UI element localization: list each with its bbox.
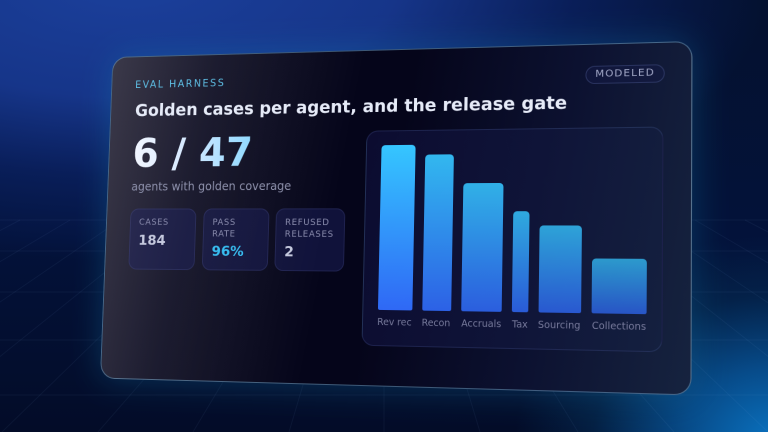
bar: Recon	[422, 154, 454, 311]
label: Tax: Tax	[512, 319, 528, 331]
eyebrow label: EVAL HARNESS	[135, 78, 226, 91]
stat label: RELEASES	[285, 230, 334, 240]
label: Accruals: Accruals	[461, 318, 501, 330]
modeled badge	[585, 64, 665, 84]
bar: Rev rec	[378, 145, 416, 310]
stat: refused releases	[274, 208, 345, 272]
stat label: REFUSED	[285, 218, 330, 228]
bar: Sourcing	[539, 225, 582, 313]
bar: Collections	[592, 258, 647, 314]
stat: cases	[128, 209, 196, 270]
title: Golden cases per agent, and the release gate	[135, 94, 567, 121]
stat value: 2	[284, 245, 294, 260]
stat label	[285, 218, 334, 240]
stat label: RATE	[212, 230, 236, 239]
label: Sourcing: Sourcing	[538, 320, 580, 332]
stat value: 184	[138, 233, 166, 249]
bar: Accruals	[461, 183, 504, 312]
stat label: PASS	[212, 218, 236, 228]
modeled badge: MODELED	[595, 67, 655, 80]
stat: pass rate	[202, 208, 270, 271]
label: Recon: Recon	[422, 318, 450, 329]
stat label	[212, 218, 236, 239]
panel: bar chart	[362, 127, 663, 352]
stat label: CASES	[139, 218, 169, 228]
label: Rev rec: Rev rec	[377, 317, 412, 329]
label: Collections: Collections	[592, 321, 646, 333]
panel: glass card	[100, 41, 692, 395]
metric caption: agents with golden coverage	[131, 179, 291, 193]
stat value: 96%	[211, 244, 244, 260]
headline metric: 6 / 47	[132, 128, 254, 176]
bar: Tax	[512, 211, 530, 312]
